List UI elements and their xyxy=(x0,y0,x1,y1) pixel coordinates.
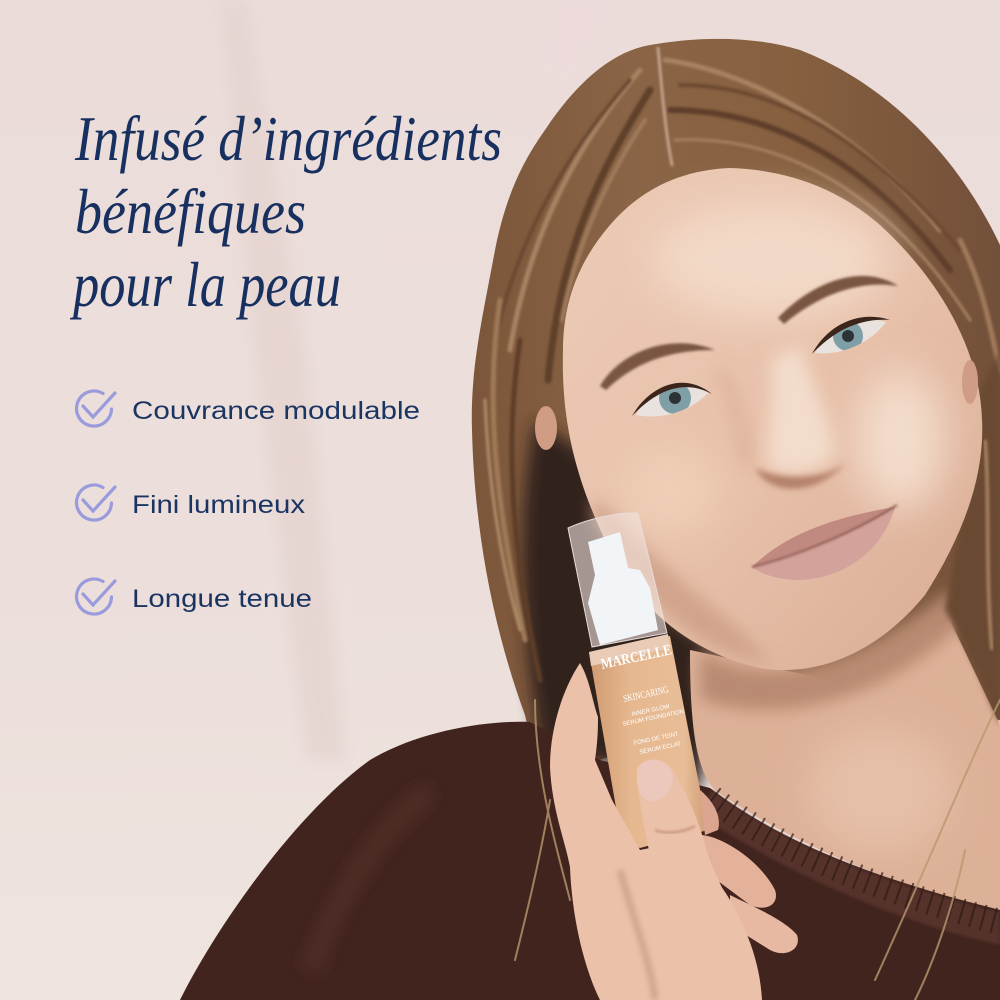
nose xyxy=(767,345,835,474)
hand xyxy=(550,663,798,1000)
product: bottle xyxy=(568,513,708,848)
product: bottle: INNER GLOW xyxy=(631,704,671,718)
pump xyxy=(588,532,658,645)
bottle label text: MARCELLE xyxy=(600,642,673,673)
title: Infusé d’ingrédients xyxy=(74,104,502,174)
icon: check circle xyxy=(77,485,115,520)
list item: Couvrance modulable xyxy=(77,391,420,426)
title: bénéfiques xyxy=(75,177,306,247)
list item: Longue tenue: Longue tenue xyxy=(132,585,312,613)
neck xyxy=(690,620,1000,915)
product: bottle: SÉRUM ÉCLAT xyxy=(639,740,682,756)
product: bottle: FOND DE TEINT xyxy=(633,731,680,747)
title xyxy=(70,104,502,320)
lips xyxy=(752,507,895,580)
shoulder hair wisps xyxy=(515,700,1000,1000)
hair back xyxy=(472,39,1000,880)
product: bottle: SKINCARING xyxy=(622,685,670,705)
photo: woman holding the bottle xyxy=(180,39,1000,1000)
thumbnail xyxy=(637,760,673,801)
product: bottle: SERUM FOUNDATION xyxy=(622,709,685,728)
right hair lock xyxy=(945,350,1000,725)
ear xyxy=(535,406,557,450)
icon: check circle xyxy=(77,579,115,614)
thumb xyxy=(637,759,745,1000)
clear cap xyxy=(568,513,667,647)
list item: Fini lumineux xyxy=(77,485,306,520)
face xyxy=(563,168,982,670)
title: pour la peau xyxy=(70,250,341,320)
list item: Longue tenue xyxy=(77,579,312,614)
eye right xyxy=(812,316,890,354)
palm and index finger xyxy=(550,663,762,1000)
bottle body xyxy=(589,636,708,848)
shirt xyxy=(180,722,1000,1000)
list item: Couvrance modulable: Couvrance modulable xyxy=(132,397,420,425)
hair strands xyxy=(485,48,1000,680)
eye left xyxy=(632,382,712,416)
list item: Fini lumineux: Fini lumineux xyxy=(132,491,306,519)
brows xyxy=(600,343,715,390)
lower fingers xyxy=(700,835,776,908)
icon: check circle xyxy=(77,391,115,426)
